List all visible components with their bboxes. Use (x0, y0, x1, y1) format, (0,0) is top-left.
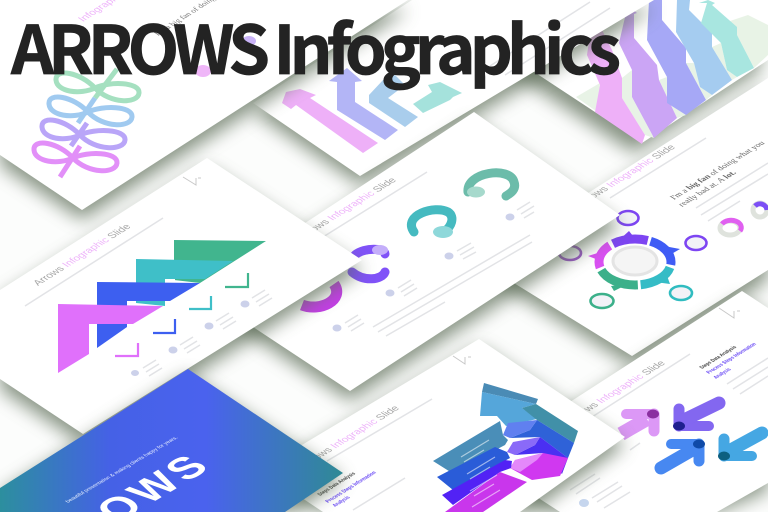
arrow: violet (679, 403, 719, 426)
slide heading: Arrows Infographic Slide (575, 143, 679, 208)
step side: teal (522, 404, 578, 443)
arrow top edge (482, 383, 538, 404)
slide heading: Arrows Infographic Slide (296, 176, 400, 241)
slide: four converging arrows (480, 291, 768, 512)
page tab (183, 177, 201, 185)
slide: knot infographic (0, 0, 408, 220)
arrow: teal (413, 82, 462, 113)
strip captions (461, 440, 500, 507)
step side: blue (510, 420, 574, 458)
steps highlight (325, 470, 378, 508)
heading underline (323, 172, 427, 237)
paragraph lines (353, 478, 405, 510)
knot: blue (49, 97, 132, 125)
page tab (453, 356, 471, 364)
strip: steel (433, 421, 508, 473)
slide: four pale arrows (253, 0, 654, 185)
chevron: green (174, 240, 266, 283)
heading underline (327, 399, 432, 461)
faint text (490, 2, 610, 75)
white notch (165, 278, 175, 284)
step icons (332, 214, 514, 332)
arrow: pink (282, 89, 378, 153)
arrow: periwinkle (329, 68, 398, 140)
arc arrow: teal (411, 210, 453, 238)
lower captions (570, 474, 630, 508)
paragraph lines (373, 235, 532, 336)
quote text: I'm a big fan of doing what you (668, 139, 767, 201)
heading underline (592, 354, 690, 450)
slide: C-shaped arrows (200, 112, 620, 401)
arrow: light blue (369, 75, 418, 127)
step face: pink (510, 453, 543, 472)
quote text: really bad at. A lot. (676, 169, 738, 208)
arrow: lilac (621, 414, 654, 434)
white notch (127, 300, 136, 306)
slide: 3D stacked arrow (260, 339, 625, 512)
arc arrow: green (467, 173, 515, 198)
arrow: light blue stair (676, 0, 732, 95)
strip: violet (442, 460, 512, 505)
slide: tall stair arrows (417, 0, 768, 153)
page tab (719, 308, 740, 318)
step side: magenta (510, 453, 568, 480)
arrow: sky (724, 433, 762, 456)
slide: circular steps with ring diagram (480, 78, 768, 366)
arrow: purple stair (619, 7, 677, 138)
step caption lines (345, 202, 534, 331)
strip: magenta (445, 472, 527, 512)
knot: green (56, 69, 139, 101)
ring diagram (588, 231, 680, 291)
small donuts (720, 203, 767, 235)
chevron: pink (58, 304, 163, 373)
steps highlight: Analysis (713, 367, 733, 380)
steps highlight: Analysis (332, 495, 352, 508)
dots (195, 36, 256, 77)
step caption lines (143, 290, 272, 376)
arrow: blue (661, 444, 699, 468)
heading underline (25, 218, 163, 306)
corner marks (115, 273, 248, 356)
arrow head face (480, 392, 537, 426)
steps highlight: Process Steps Information (325, 470, 378, 504)
slide: blue cover (0, 369, 343, 512)
step icons (131, 300, 250, 376)
paragraph lines (696, 163, 768, 221)
knot: purple (42, 120, 125, 148)
heading underline (610, 138, 706, 198)
arc arrow: purple (352, 245, 388, 279)
slide: chevron steps (0, 158, 362, 444)
paragraph lines (727, 358, 768, 394)
chevron: blue (97, 282, 200, 348)
steps highlight (706, 342, 759, 380)
slide heading: Arrows Infographic Slide (299, 404, 403, 469)
steps heading: Steps Data Analysis (699, 345, 739, 370)
arc arrow: magenta (302, 284, 337, 307)
step face: blue (503, 420, 537, 438)
arrow: teal stair (699, 0, 754, 77)
knot: pink (34, 143, 117, 177)
slide heading: Arrows Infographic Slide (31, 222, 134, 288)
cover tagline: beautiful presentation & making clients happy for years. (65, 436, 180, 504)
slide heading: Arrows Infographic Slide (565, 359, 669, 424)
steps heading: Steps Data Analysis (317, 472, 357, 497)
chevron: teal (136, 259, 233, 306)
arrow: periwinkle stair (647, 0, 706, 115)
3D arrow (433, 383, 578, 512)
arrow: pink stair (587, 26, 645, 144)
icon rings (559, 211, 706, 308)
ring arrowheads (588, 231, 680, 291)
step face: violet (507, 437, 540, 455)
strip: blue (437, 447, 510, 490)
step side: violet (515, 437, 568, 474)
